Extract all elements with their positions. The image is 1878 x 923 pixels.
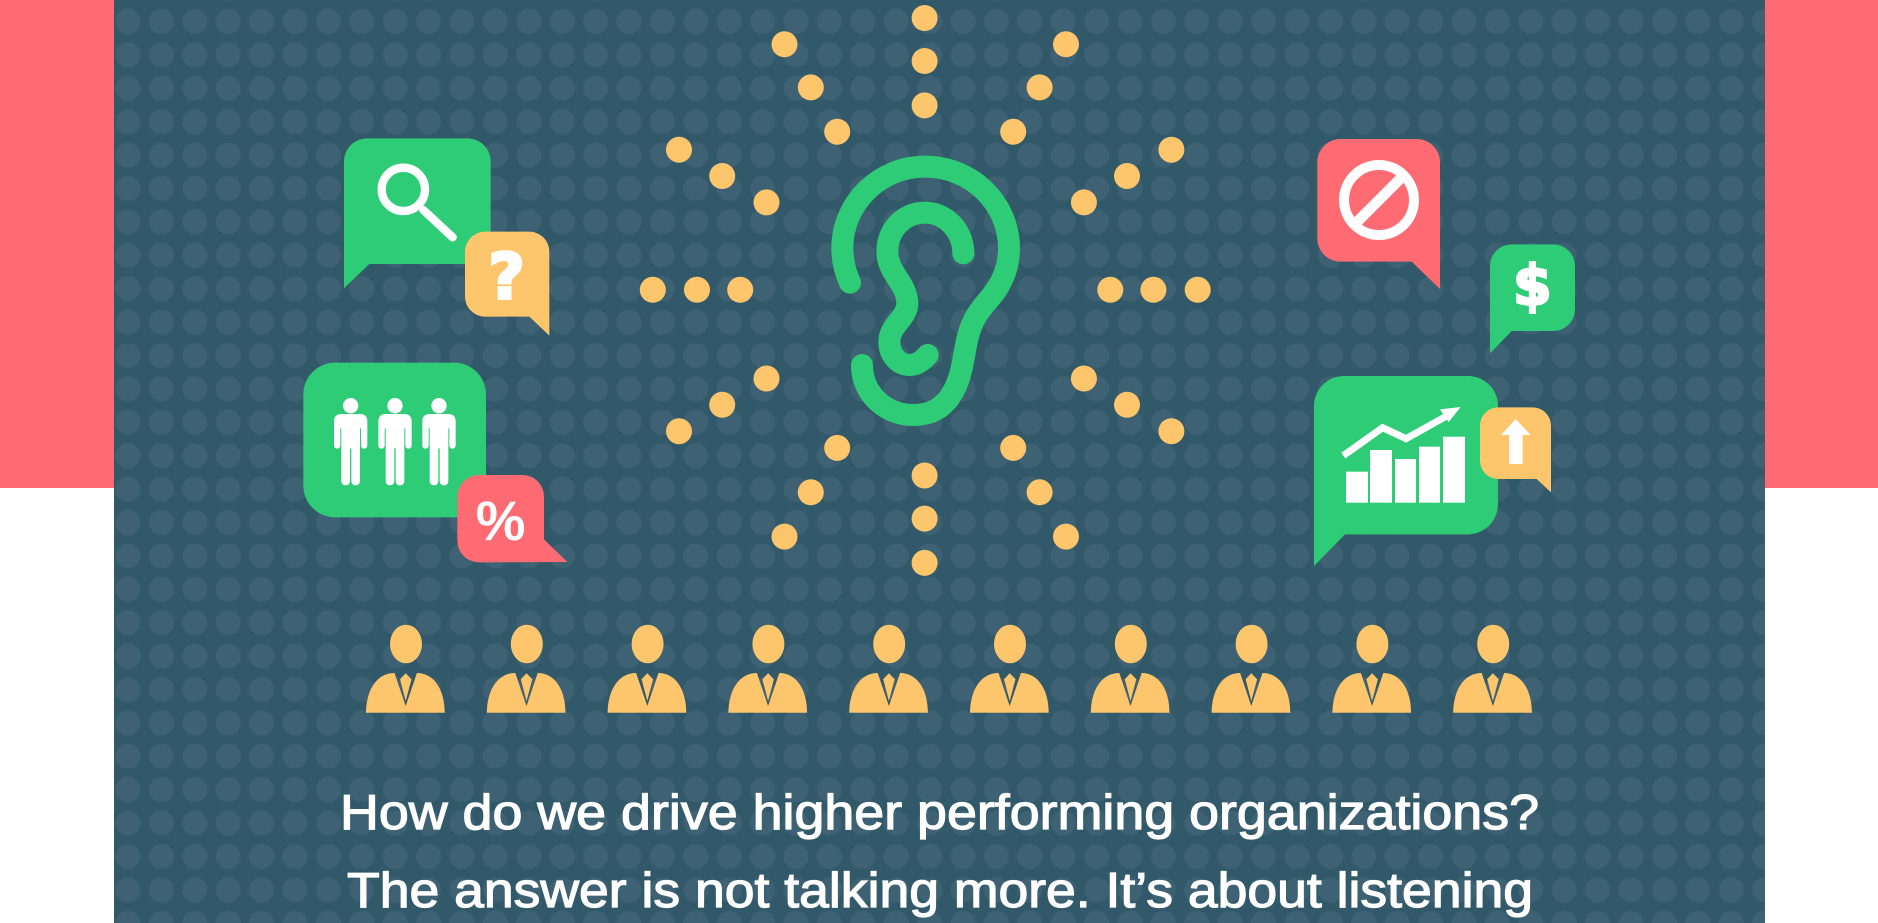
bubble: prohibited sign — [1317, 139, 1440, 289]
bubble: up arrow — [1480, 407, 1551, 492]
bubble: magnifying glass — [344, 138, 491, 288]
bubble: growth chart — [1314, 376, 1498, 566]
bubble: percent — [457, 475, 567, 562]
icon: ear — [842, 167, 1009, 415]
background band: right coral — [1765, 0, 1878, 488]
bubble: percent: % — [476, 489, 526, 552]
bubble: dollar sign — [1490, 244, 1575, 353]
text: answer line: The answer is not talking more. It’s about listening — [347, 864, 1533, 918]
text: question line: How do we drive higher performing organizations? — [340, 786, 1539, 840]
row of ten business people — [366, 625, 1532, 713]
background band: left coral — [0, 0, 114, 488]
left speech bubbles — [303, 138, 567, 562]
bubble: question mark — [465, 232, 549, 336]
bubble: dollar sign: $ — [1513, 254, 1552, 318]
right speech bubbles — [1314, 139, 1575, 566]
radiating dots around the ear — [640, 5, 1211, 576]
bubble: question mark: ? — [488, 239, 525, 313]
bubble: three people — [303, 363, 486, 517]
